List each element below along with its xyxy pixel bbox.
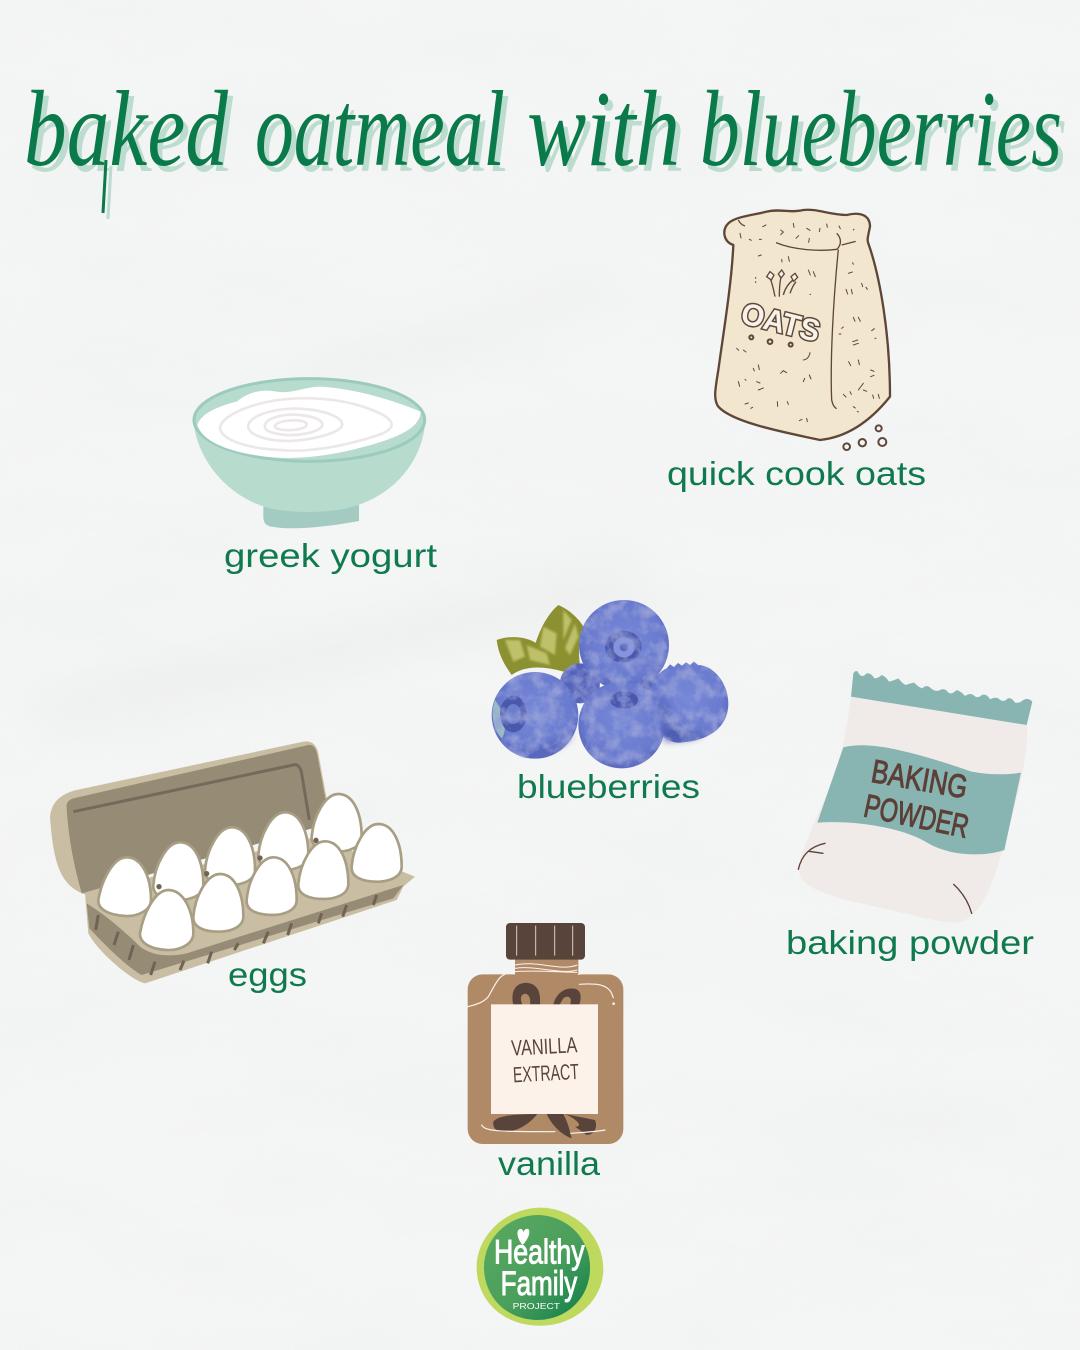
label: eggs: eggs — [228, 956, 307, 993]
icon: oats bag — [715, 210, 890, 450]
logo heart — [517, 1229, 529, 1245]
label: vanilla: vanilla — [498, 1145, 601, 1182]
berries — [492, 600, 728, 768]
packet lettering: BAKING — [869, 752, 970, 805]
oats bag lettering: OATS — [738, 296, 823, 349]
eggs — [98, 794, 402, 950]
icon: vanilla extract bottle — [458, 923, 623, 1144]
label: blueberries: blueberries — [517, 768, 700, 805]
oat grains — [749, 335, 886, 450]
label: greek yogurt: greek yogurt — [224, 537, 437, 574]
title: oatmeal — [255, 70, 505, 189]
icon: blueberries — [492, 600, 728, 768]
logo wordmark — [494, 1233, 585, 1311]
bottle label text: VANILLA — [511, 1032, 578, 1061]
logo wordmark: Family — [501, 1265, 578, 1303]
leaves — [497, 605, 583, 675]
label: baking powder: baking powder — [786, 924, 1034, 961]
bottle label text — [511, 1032, 580, 1087]
logo wordmark: PROJECT — [513, 1301, 561, 1311]
logo wordmark: Healthy — [494, 1233, 585, 1271]
packet lettering — [861, 752, 972, 845]
bottle label text: EXTRACT — [512, 1059, 580, 1087]
title: baked — [24, 70, 229, 189]
carton tray — [85, 837, 415, 983]
oat sprig on bag — [767, 270, 798, 297]
logo: Healthy Family Project — [477, 1208, 603, 1326]
label: quick cook oats: quick cook oats — [667, 455, 926, 492]
icon: yogurt bowl — [193, 379, 426, 528]
packet lettering: POWDER — [861, 787, 972, 845]
icon: egg carton — [50, 741, 415, 983]
carton lid — [50, 741, 330, 895]
icon: baking powder packet — [798, 671, 1032, 923]
title: with — [527, 70, 680, 189]
title — [24, 70, 1062, 213]
